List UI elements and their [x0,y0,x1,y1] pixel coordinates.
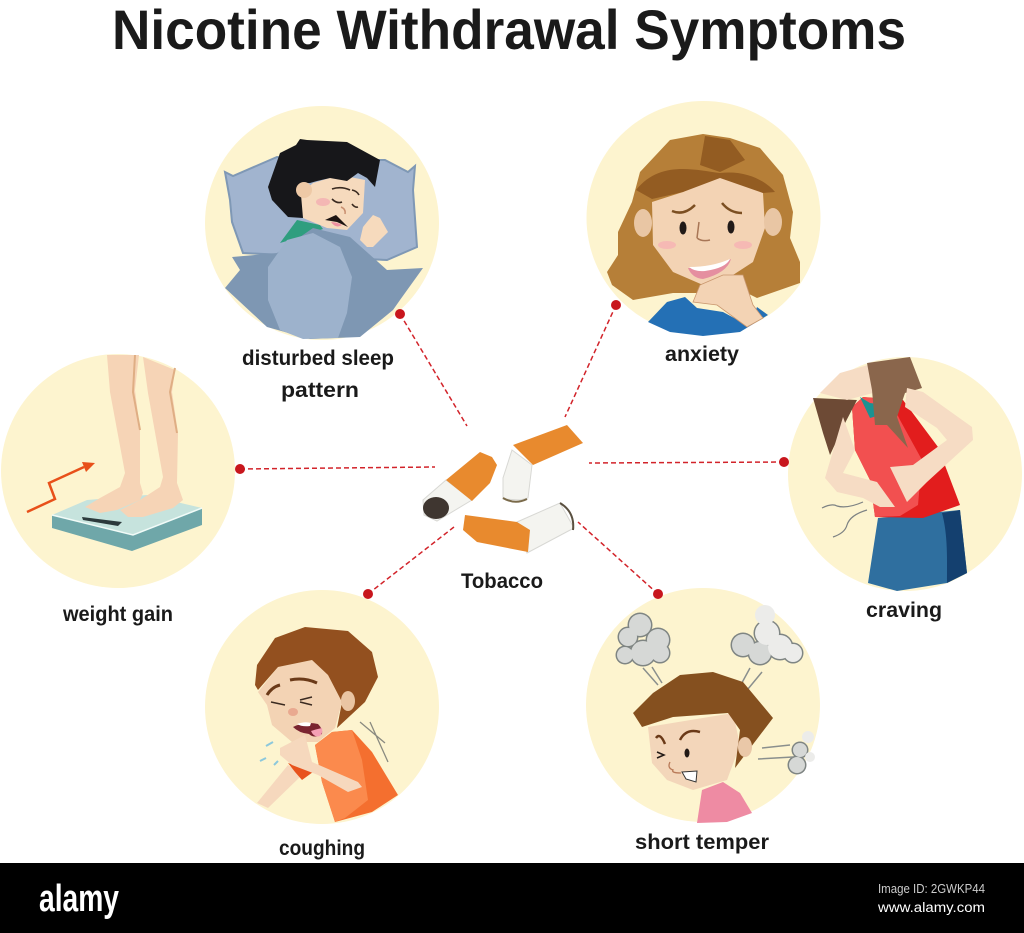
url: www.alamy.com [877,900,985,915]
label: craving [866,599,942,622]
label: coughing [279,837,365,860]
icon: angry boy [633,672,773,823]
panel: disturbed sleep pattern: pattern [281,379,359,402]
label: Tobacco [461,570,543,593]
panel: anxiety [586,101,820,366]
label: weight gain [62,603,173,626]
icon: craving woman [813,357,973,591]
icon: anxious woman [607,134,800,336]
label: disturbed sleep [242,347,394,370]
connector lines [235,300,789,599]
panel: disturbed sleep pattern [205,106,439,402]
icon: blanket [225,228,423,339]
watermark logo: alamy [39,878,119,920]
icon: sleeping child [268,139,388,247]
icon: cigarette butt bottom [463,503,574,553]
panel: coughing [205,590,439,860]
image id: Image ID: 2GWKP44 [878,881,985,896]
icon: legs on scale [85,355,183,517]
icon: cigarette butt top [503,425,583,502]
icon: cigarette butt left [423,452,497,521]
label: anxiety [665,343,739,366]
panel: weight gain [1,354,235,626]
panel: short temper [586,588,820,854]
icon: bathroom scale [52,495,202,551]
icon: coughing boy [255,627,398,822]
icon: pillow [225,157,417,260]
panel: craving [788,357,1022,622]
label: short temper [635,831,769,854]
icon: smoke clouds [616,605,815,774]
footer bar [0,863,1024,933]
panel: tobacco [423,425,583,593]
icon: arrow going up [27,462,95,512]
